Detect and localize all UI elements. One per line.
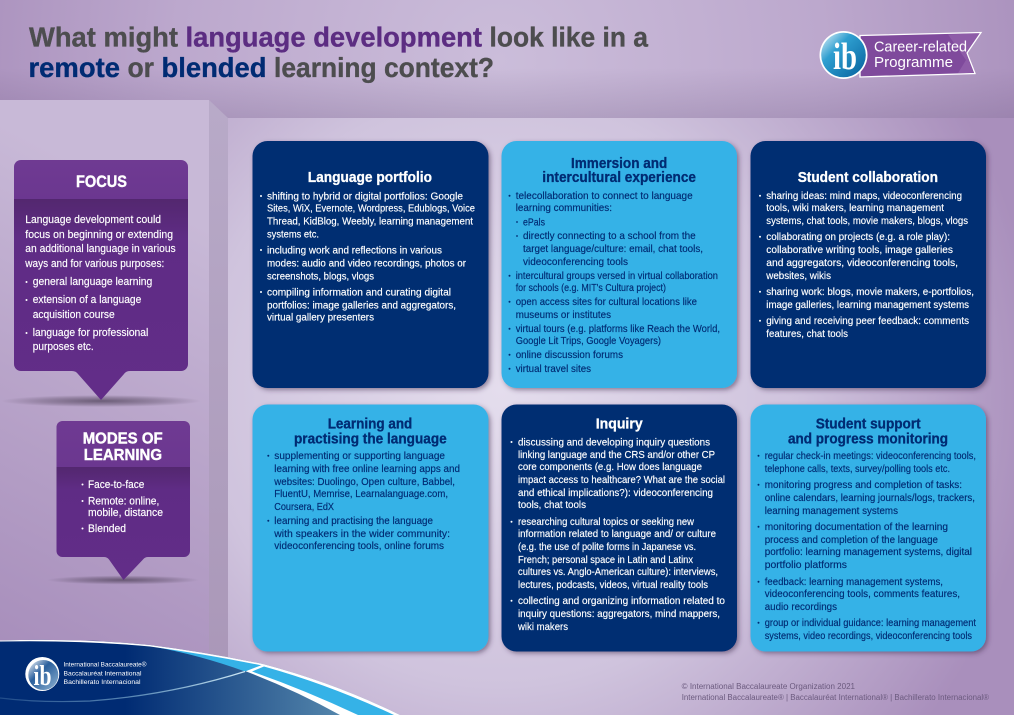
title: remote	[28, 52, 120, 83]
title: look like in a	[490, 22, 648, 52]
title: What might	[29, 22, 178, 52]
list: language portfolio: portfolios: image galleries and aggregators,	[267, 300, 456, 311]
list: modes: Remote: online,	[88, 495, 159, 507]
list: student support: videoconferencing tools, comments features,	[765, 589, 960, 600]
list: student support: audio recordings	[765, 602, 837, 613]
list: student support	[758, 451, 976, 642]
list: focus purposes: purposes etc.	[33, 341, 94, 353]
text block: focus description: ways and for various purposes:	[24, 258, 164, 270]
list: inquiry: inquiry questions: aggregators, mind mappers,	[518, 609, 720, 620]
list: immersion: directly connecting to a school from the	[523, 231, 696, 242]
heading: modes of learning: LEARNING	[84, 447, 162, 464]
list: inquiry: linking language and the CRS and/or other CP	[518, 450, 715, 461]
list: language portfolio: systems etc.	[267, 229, 319, 240]
heading: student support: Student support	[816, 416, 921, 432]
list: student collaboration: systems, chat tools, movie makers, blogs, vlogs	[766, 216, 968, 227]
list: inquiry: lectures, podcasts, videos, virtual reality tools	[518, 580, 708, 591]
logo: IB: ib	[34, 661, 52, 692]
list: immersion: online discussion forums	[516, 350, 623, 361]
list: language portfolio: shifting to hybrid or digital portfolios: Google	[267, 191, 463, 202]
list: focus purposes: extension of a language	[33, 294, 141, 306]
panel: learning and practising the language	[252, 404, 488, 652]
heading: modes of learning: MODES OF	[83, 430, 163, 448]
list: learning and practising: with speakers in the wider community:	[273, 529, 450, 540]
list: focus purposes	[26, 276, 152, 353]
list: student collaboration	[759, 191, 974, 340]
list: modes: Face-to-face	[88, 479, 144, 491]
heading: modes of learning	[83, 430, 163, 464]
panel: inquiry	[502, 404, 737, 652]
list: learning and practising: supplementing or supporting language	[274, 451, 445, 462]
list: language portfolio: Sites, WiX, Evernote, Wordpress, Edublogs, Voice	[267, 203, 475, 214]
text: IB names	[64, 660, 147, 686]
list: student collaboration: image galleries, learning management systems	[766, 300, 969, 311]
logo: IB Career-related Programme: ib	[833, 36, 857, 78]
list: modes: mobile, distance	[88, 507, 163, 519]
list: student collaboration: giving and receiving peer feedback: comments	[766, 316, 969, 327]
logo: IB Career-related Programme	[820, 31, 981, 79]
text block: focus description: Language development could	[25, 214, 161, 226]
list: immersion: ePals	[523, 217, 545, 228]
title: language development	[186, 22, 482, 52]
list: student support: learning management systems	[765, 506, 898, 517]
list: language portfolio: virtual gallery presenters	[267, 312, 374, 323]
list: inquiry: discussing and developing inquiry questions	[518, 437, 710, 448]
list: immersion: learning communities:	[516, 203, 612, 214]
panel: student support and progress monitoring	[750, 404, 986, 652]
list: inquiry	[510, 437, 725, 633]
list: student collaboration: sharing ideas: mind maps, videoconferencing	[766, 191, 962, 202]
heading: learning and practising: Learning and	[328, 416, 412, 432]
text block: focus description	[24, 214, 176, 270]
list: student support: portfolio: learning management systems, digital	[765, 547, 972, 558]
heading: student collaboration: Student collaboration	[798, 170, 938, 186]
heading: learning and practising	[294, 416, 447, 448]
list: modes	[82, 479, 163, 535]
heading: focus: FOCUS	[76, 173, 127, 191]
list: learning and practising: videoconferencing tools, online forums	[274, 541, 444, 552]
list: student collaboration: websites, wikis	[765, 271, 831, 282]
heading: immersion: intercultural experience	[542, 170, 696, 186]
list: learning and practising: Coursera, EdX	[274, 502, 334, 513]
heading: immersion	[542, 156, 696, 186]
text: IB names: Bachillerato Internacional	[64, 679, 141, 686]
list: immersion: target language/culture: email, chat tools,	[523, 244, 703, 255]
list: inquiry: collecting and organizing information related to	[518, 596, 725, 607]
list: student collaboration: and aggregators, videoconferencing tools,	[766, 258, 958, 269]
folded edge of panel	[209, 100, 228, 715]
list: immersion: videoconferencing tools	[523, 257, 628, 268]
list: student support: process and completion of the language	[765, 535, 938, 546]
panel: focus	[1, 160, 201, 407]
list: inquiry: information related to language and/ or culture	[518, 529, 716, 540]
heading: student support	[788, 416, 948, 448]
panel: immersion and intercultural experience	[502, 141, 737, 388]
list: immersion: Google Lit Trips, Google Voyagers)	[516, 336, 661, 347]
list: learning and practising: websites: Duolingo, Open culture, Babbel,	[273, 477, 455, 488]
list: inquiry: cultures vs. Anglo-American culture): interviews,	[518, 567, 718, 578]
panel: modes of learning	[47, 421, 199, 584]
main content panel	[228, 118, 1014, 715]
copyright text: International Baccalaureate® | Baccalauréat International® | Bachillerato Internacional®	[682, 693, 989, 702]
list: language portfolio: screenshots, blogs, vlogs	[267, 271, 374, 282]
list: language portfolio	[260, 191, 475, 323]
title	[28, 22, 648, 83]
list: inquiry: core components (e.g. How does language	[518, 462, 702, 473]
heading: learning and practising: practising the language	[294, 432, 447, 448]
footer swoosh with IB logo	[0, 640, 400, 715]
list: immersion: open access sites for cultural locations like	[516, 297, 697, 308]
text: IB names: International Baccalaureate®	[64, 660, 147, 668]
list: student support: feedback: learning management systems,	[765, 577, 943, 588]
list: student collaboration: sharing work: blogs, movie makers, e-portfolios,	[766, 287, 974, 298]
text block: focus description: focus on beginning or extending	[25, 229, 173, 241]
list: modes: Blended	[88, 523, 126, 535]
list: student support: monitoring documentation of the learning	[765, 522, 948, 533]
list: inquiry: tools, chat tools	[518, 500, 586, 511]
title: or	[128, 52, 154, 83]
logo: IB Career-related Programme: Career-related	[874, 38, 967, 56]
panel: student collaboration	[750, 141, 986, 388]
heading: student support: and progress monitoring	[788, 432, 948, 448]
list: inquiry: impact access to healthcare? What are the social	[518, 475, 725, 486]
list: student support: telephone calls, texts, survey/polling tools etc.	[765, 464, 950, 475]
heading: immersion: Immersion and	[571, 156, 667, 172]
list: learning and practising: learning with free online learning apps and	[274, 464, 460, 475]
list: language portfolio: Thread, KidBlog, Weebly, learning management	[267, 216, 473, 227]
list: student collaboration: features, chat tools	[766, 329, 848, 340]
list: student support: portfolio platforms	[765, 560, 847, 571]
list: immersion: intercultural groups versed in virtual collaboration	[516, 271, 718, 282]
list: language portfolio: modes: audio and video recordings, photos or	[267, 258, 466, 269]
list: language portfolio: including work and reflections in various	[267, 245, 442, 256]
list: focus purposes: acquisition course	[33, 309, 115, 321]
list: immersion: for schools (e.g. MIT's Cultura project)	[516, 283, 666, 294]
list: inquiry: (e.g. the use of polite forms in Japanese vs.	[518, 542, 696, 553]
list: immersion: museums or institutes	[516, 310, 611, 321]
list: inquiry: French; personal space in Latin and Latinx	[518, 555, 694, 566]
copyright text: © International Baccalaureate Organization 2021	[682, 682, 856, 691]
heading: inquiry: Inquiry	[596, 416, 643, 432]
list: student support: group or individual guidance: learning management	[765, 618, 976, 629]
text block: focus description: an additional language in various	[25, 243, 176, 255]
logo: IB Career-related Programme: Programme	[874, 54, 953, 71]
list: student collaboration: collaborative writing tools, image galleries	[766, 245, 953, 256]
list: student support: regular check-in meetings: videoconferencing tools,	[765, 451, 976, 462]
left column panel	[0, 100, 209, 715]
logo: IB	[25, 657, 59, 692]
list: learning and practising: FluentU, Memrise, Learnalanguage.com,	[274, 489, 448, 500]
list: student support: online calendars, learning journals/logs, trackers,	[765, 493, 975, 504]
list: immersion: telecollaboration to connect to language	[516, 191, 693, 202]
list: learning and practising: learning and practising the language	[274, 516, 433, 527]
list: student collaboration: collaborating on projects (e.g. a role play):	[766, 232, 950, 243]
list: learning and practising	[267, 451, 460, 552]
text: IB names: Baccalauréat International	[64, 670, 142, 678]
list: student support: monitoring progress and completion of tasks:	[765, 480, 962, 491]
list: focus purposes: language for professional	[33, 327, 148, 339]
list: inquiry: researching cultural topics or seeking new	[518, 517, 694, 528]
list: inquiry: wiki makers	[517, 622, 568, 633]
panel: language portfolio	[252, 141, 488, 388]
list: focus purposes: general language learning	[33, 276, 152, 288]
list: language portfolio: compiling information and curating digital	[267, 287, 451, 298]
list: student support: systems, video recordings, videoconferencing tools	[765, 631, 972, 642]
list: immersion: virtual travel sites	[516, 364, 591, 375]
list: immersion	[508, 191, 720, 375]
title: blended	[162, 52, 266, 83]
list: inquiry: and ethical implications?): videoconferencing	[518, 488, 713, 499]
list: immersion: virtual tours (e.g. platforms like Reach the World,	[516, 324, 720, 335]
copyright text	[682, 682, 989, 702]
heading: language portfolio: Language portfolio	[308, 170, 432, 186]
title: learning context?	[274, 52, 494, 83]
list: student collaboration: tools, wiki makers, learning management	[766, 203, 944, 214]
